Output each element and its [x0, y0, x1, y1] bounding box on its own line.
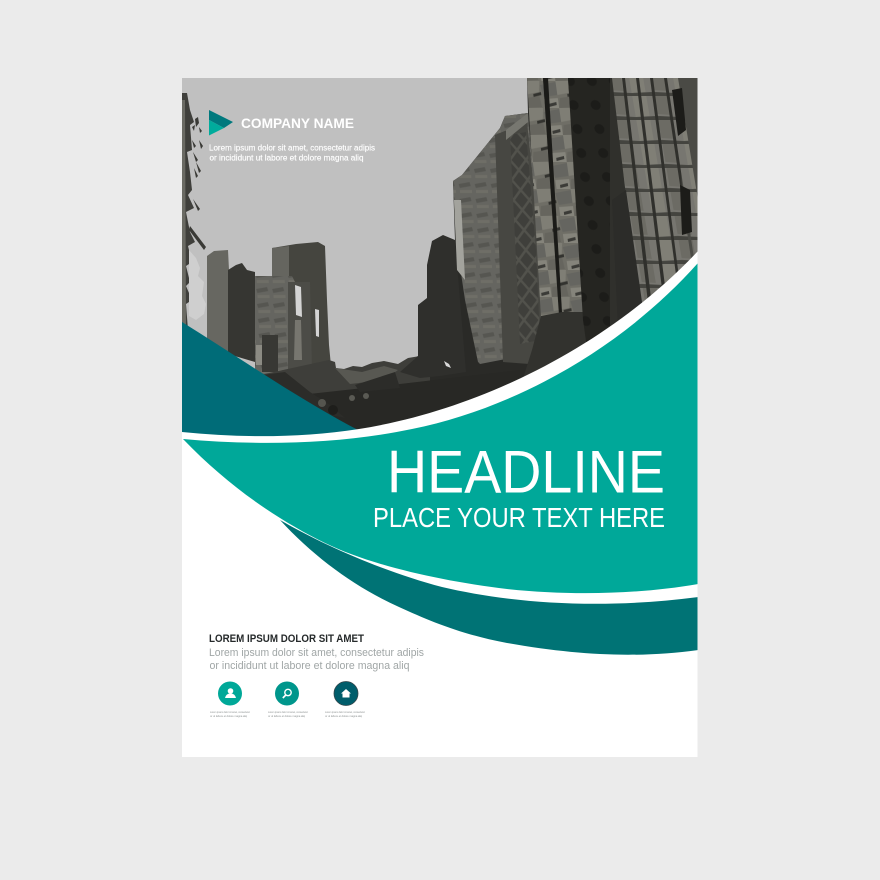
icon: house: [334, 682, 358, 706]
right striped facade: [610, 78, 698, 348]
brochure page: [182, 78, 698, 757]
low skyline and ground: [264, 356, 430, 430]
lower body text: [209, 647, 425, 672]
dark teal lower swoosh: [280, 520, 698, 655]
company description: Lorem ipsum dolor sit amet, consectetur adipis: [209, 142, 375, 152]
dark base of right district: [417, 78, 570, 380]
icon caption 1: [210, 711, 250, 718]
street light glint: [444, 361, 451, 368]
headline: HEADLINE: [387, 438, 665, 506]
icon caption 2: or ut labore et dolore magna aliq: [268, 714, 305, 718]
company name: COMPANY NAME: [241, 115, 354, 131]
icon caption 1: or ut labore et dolore magna aliq: [210, 714, 247, 718]
icon caption 3: [325, 711, 365, 718]
black window tower: [568, 78, 610, 342]
white curved ribbon: [182, 252, 698, 444]
logo triangle: [209, 110, 233, 136]
sky panel: [182, 78, 528, 369]
left edge tower: [182, 93, 206, 330]
grey mid tower: [453, 113, 533, 364]
cityscape photo: [182, 78, 698, 445]
icon caption 3: Lorem ipsum dolor sit amet, consectetur: [325, 710, 365, 714]
company description: or incididunt ut labore et dolore magna aliq: [210, 152, 364, 162]
icon: magnifier: [275, 682, 299, 706]
brick columns: [527, 78, 582, 365]
icon caption 3: or ut labore et dolore magna aliq: [325, 714, 362, 718]
white page sheet: [182, 520, 698, 757]
icon: person: [218, 682, 242, 706]
dark teal wedge left: [182, 322, 360, 440]
icon caption 1: Lorem ipsum dolor sit amet, consectetur: [210, 710, 250, 714]
icon caption 2: Lorem ipsum dolor sit amet, consectetur: [268, 710, 308, 714]
lower body text: Lorem ipsum dolor sit amet, consectetur adipis: [209, 647, 425, 659]
pale sliver and lattice tower: [454, 113, 541, 364]
brochure infographic: [182, 78, 698, 757]
icon caption 2: [268, 711, 308, 718]
lower heading: LOREM IPSUM DOLOR SIT AMET: [209, 633, 364, 645]
subheadline: PLACE YOUR TEXT HERE: [373, 502, 665, 533]
teal headline band: [183, 263, 698, 593]
mid-left towers: [207, 242, 330, 374]
company description: [209, 142, 375, 162]
lower body text: or incididunt ut labore et dolore magna aliq: [210, 660, 410, 672]
dark foreground tower: [400, 235, 455, 378]
